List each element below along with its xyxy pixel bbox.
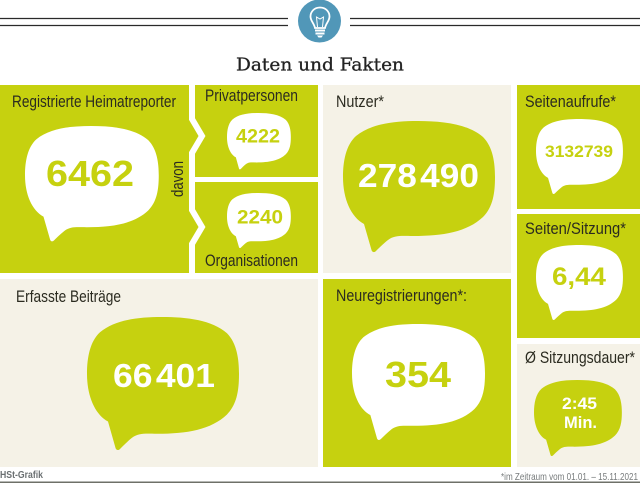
label: Nutzer: Nutzer* [336, 92, 384, 111]
arrows: chevron divider [192, 85, 202, 273]
credit: HSt-Grafik [0, 469, 43, 481]
speech bubble: 4222 [227, 113, 291, 169]
speech bubble: 6,44 [536, 245, 623, 320]
speech bubble: 3132739 [536, 119, 623, 194]
header rule: left [0, 18, 288, 26]
panel: Sitzungsdauer [517, 344, 640, 467]
header rule: right [350, 18, 640, 26]
bottom rule [0, 482, 640, 483]
number: 3132739: 3132739 [545, 143, 613, 161]
label: Registrierte Heimatreporter: Registrierte Heimatreporter [12, 92, 176, 111]
label: Organisationen: Organisationen [205, 251, 298, 270]
speech bubble: 278 490 [343, 121, 495, 252]
panel: Seiten/Sitzung [517, 214, 640, 338]
label: Privatpersonen: Privatpersonen [205, 86, 298, 105]
speech bubble: 66 401 [87, 317, 239, 450]
number: 354: 354 [385, 354, 451, 395]
panel: Organisationen [195, 182, 318, 273]
label: Erfasste Beiträge: Erfasste Beiträge [16, 287, 121, 306]
speech bubble: 6462 [25, 126, 159, 241]
panel: Nutzer [323, 85, 511, 273]
number: 6462: 6462 [46, 153, 134, 194]
label: Seiten/Sitzung: Seiten/Sitzung* [525, 219, 626, 238]
label: davon: davon [168, 161, 187, 197]
speech bubble: 2240 [227, 193, 291, 248]
unit: Min.: Min. [564, 413, 597, 432]
panel: Seitenaufrufe [517, 85, 640, 209]
panel: Erfasste Beiträge [0, 279, 318, 467]
label: Seitenaufrufe: Seitenaufrufe* [525, 92, 616, 111]
number: 6,44: 6,44 [552, 263, 606, 291]
number: 278 490: 278 490 [358, 157, 479, 194]
title: Daten und Fakten [236, 54, 404, 76]
number: 66 401: 66 401 [113, 357, 215, 394]
panel: Registrierte Heimatreporter [0, 85, 195, 273]
panel: Privatpersonen [195, 85, 318, 177]
number: 2:45: 2:45 [562, 394, 597, 413]
number: 2240: 2240 [237, 208, 283, 228]
icon: light bulb [298, 0, 341, 42]
number: 4222: 4222 [236, 126, 280, 148]
label: Neuregistrierungen: Neuregistrierungen*: [336, 286, 467, 305]
speech bubble: 354 [352, 324, 485, 440]
speech bubble: 2:45 Min. [534, 380, 622, 456]
panel: Neuregistrierungen [323, 279, 511, 467]
